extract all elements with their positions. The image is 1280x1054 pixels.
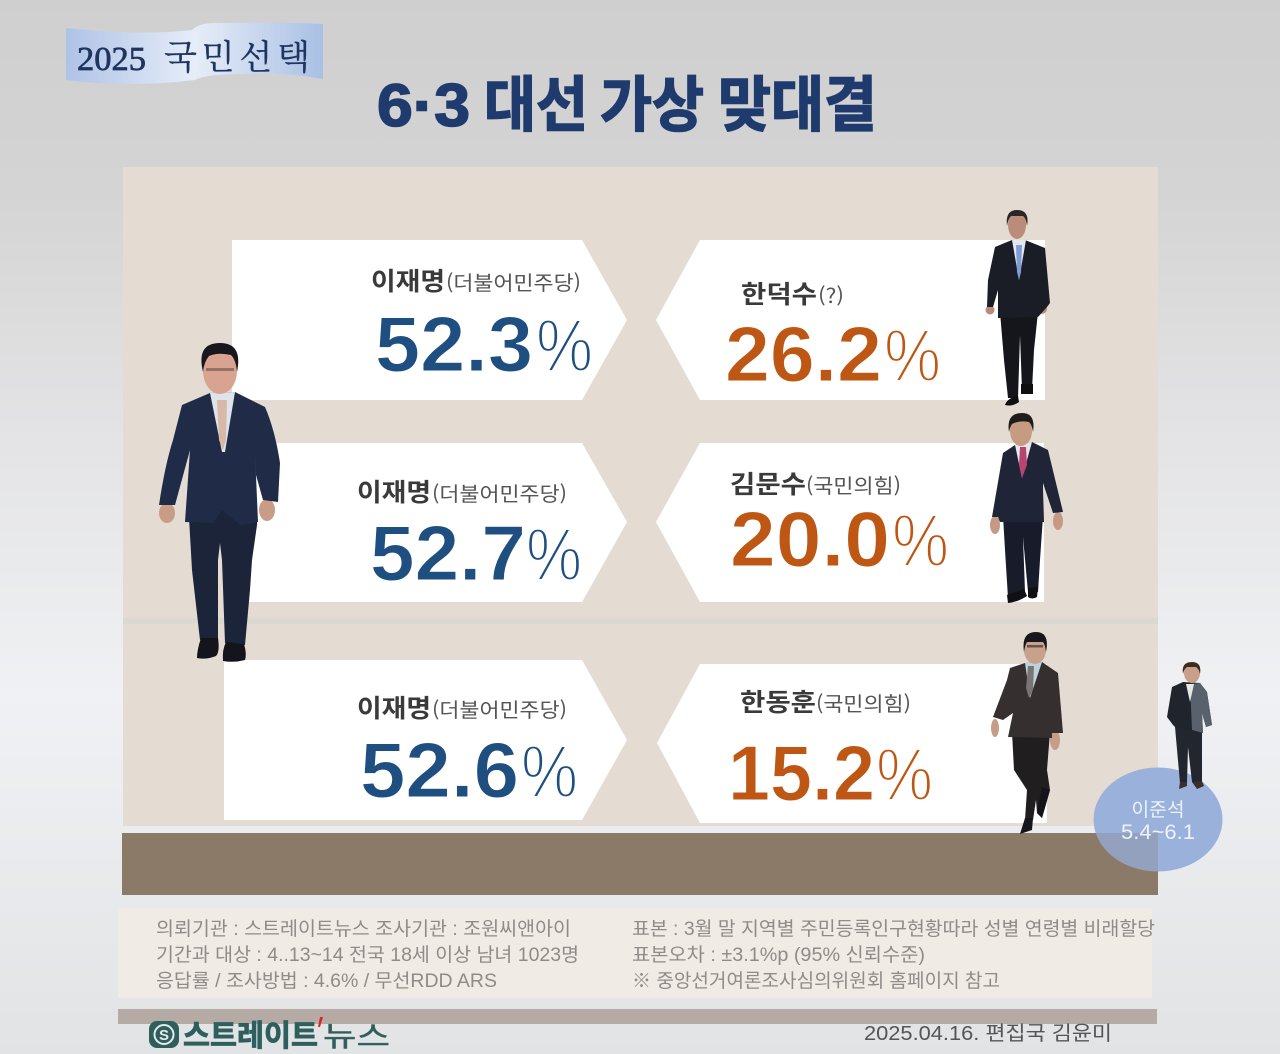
figure: 이준석 <box>1167 662 1212 789</box>
title <box>377 57 877 144</box>
title: 대선 <box>484 57 588 144</box>
matchup row 1 right: 한덕수 26.2%: 26.2 <box>725 310 882 398</box>
panel: survey notes: 기간과 대상 : 4..13~14 전국 18세 이상 남녀 1023명 <box>156 944 579 966</box>
date and editor credit: 2025.04.16. 편집국 김윤미 <box>864 1022 1112 1045</box>
matchup row 2 right: 김문수 20.0%: 20.0 <box>730 495 890 583</box>
panel: survey notes: 표본오차 : ±3.1%p (95% 신뢰수준) <box>632 944 925 966</box>
callout: 이준석 5.4~6.1 <box>1090 662 1222 873</box>
logo: 스트레이트뉴스: 뉴스 <box>323 1015 390 1054</box>
matchup row 1 left: 이재명 52.3% <box>232 240 627 400</box>
matchup row 2 left: 이재명 52.7% <box>232 443 627 602</box>
matchup row 1 right: 한덕수 26.2%: (?) <box>818 280 844 309</box>
matchup row 3 left: 이재명 52.6% <box>224 660 627 820</box>
matchup row 1 left: 이재명 52.3%: % <box>536 304 593 387</box>
panel: survey notes: 표본 : 3월 말 지역별 주민등록인구현황따라 성별 연령별 비래할당 <box>632 918 1155 940</box>
ground band <box>122 833 1158 895</box>
matchup row 2 left: 이재명 52.7%: (더불어민주당) <box>432 478 567 507</box>
figure: 한덕수 <box>986 210 1050 406</box>
logo: 스트레이트뉴스 <box>149 1011 390 1054</box>
title: 6·3 <box>377 72 470 139</box>
tag: 2025 국민선택 <box>66 23 323 84</box>
matchup row 2 right: 김문수 20.0%: % <box>892 499 949 582</box>
matchup row 1 left: 이재명 52.3%: (더불어민주당) <box>446 267 581 296</box>
panel: survey notes <box>118 908 1155 998</box>
figure: 한동훈 <box>991 632 1063 834</box>
figure: 이재명 <box>159 343 280 662</box>
matchup row 3 left: 이재명 52.6%: (더불어민주당) <box>432 694 567 723</box>
matchup row 1 left: 이재명 52.3%: 52.3 <box>375 300 533 388</box>
matchup row 3 right: 한동훈 15.2%: 15.2 <box>728 729 875 817</box>
matchup row 2 left: 이재명 52.7%: % <box>526 513 582 596</box>
tag: 2025 국민선택: 2025 <box>77 41 146 78</box>
matchup row 2 left: 이재명 52.7%: 52.7 <box>370 509 526 597</box>
matchup row 3 right: 한동훈 15.2%: 한동훈 <box>740 683 816 719</box>
matchup row 2 right: 김문수 20.0% <box>656 443 1044 602</box>
matchup row 1 right: 한덕수 26.2%: 한덕수 <box>741 275 817 311</box>
matchup row 3 right: 한동훈 15.2%: (국민의힘) <box>816 688 911 717</box>
matchup row 1 right: 한덕수 26.2%: % <box>884 314 941 397</box>
matchup row 3 right: 한동훈 15.2% <box>657 664 1047 823</box>
matchup row 1 right: 한덕수 26.2% <box>656 240 1045 400</box>
matchup row 2 right: 김문수 20.0%: (국민의힘) <box>806 470 901 499</box>
panel: beige background <box>123 167 1158 826</box>
callout: 이준석 5.4~6.1: 이준석 <box>1132 795 1184 822</box>
matchup row 3 right: 한동훈 15.2%: % <box>876 733 933 816</box>
panel: survey notes: 의뢰기관 : 스트레이트뉴스 조사기관 : 조원씨앤아이 <box>156 918 571 940</box>
callout: 이준석 5.4~6.1: 5.4~6.1 <box>1121 821 1195 844</box>
matchup row 3 left: 이재명 52.6%: 이재명 <box>357 689 431 725</box>
panel: survey notes: ※ 중앙선거여론조사심의위원회 홈페이지 참고 <box>632 970 1000 992</box>
panel: survey notes: 응답률 / 조사방법 : 4.6% / 무선RDD ARS <box>156 970 497 992</box>
tag: 2025 국민선택: 국민선택 <box>164 30 310 79</box>
matchup row 2 left: 이재명 52.7%: 이재명 <box>357 473 431 509</box>
matchup row 2 right: 김문수 20.0%: 김문수 <box>730 465 806 501</box>
matchup row 3 left: 이재명 52.6%: % <box>521 730 578 813</box>
logo: 스트레이트뉴스: S <box>159 1027 169 1044</box>
logo: 스트레이트뉴스: 스트레이트 <box>183 1011 318 1054</box>
matchup row 3 left: 이재명 52.6%: 52.6 <box>360 726 519 814</box>
matchup row 1 left: 이재명 52.3%: 이재명 <box>371 262 445 298</box>
title: 맞대결 <box>718 57 877 144</box>
title: 가상 <box>600 57 704 144</box>
footer bar <box>118 1009 1157 1024</box>
figure: 김문수 <box>990 413 1063 603</box>
